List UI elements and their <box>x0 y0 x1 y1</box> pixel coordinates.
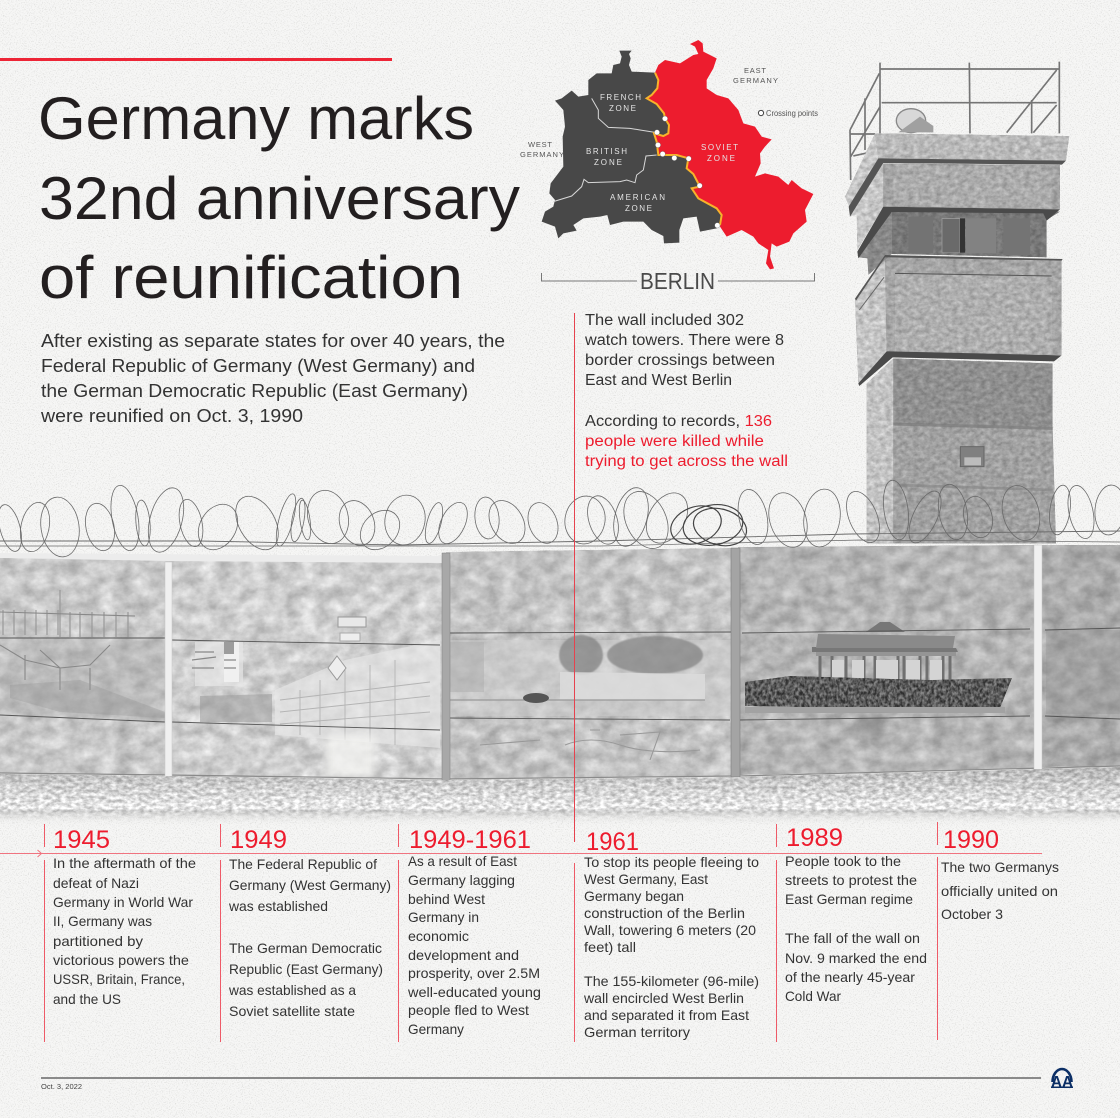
title <box>38 85 520 311</box>
wall: panels <box>0 545 1120 779</box>
timeline: 1949: Republic (East Germany) <box>229 961 383 977</box>
accent line above title <box>0 58 392 61</box>
map: western zones <box>542 51 722 243</box>
title: Germany marks <box>38 85 474 152</box>
timeline <box>0 822 1059 1042</box>
timeline: 1961: Germany began <box>584 888 684 904</box>
timeline: 1961: construction of the Berlin <box>584 905 745 921</box>
timeline: 1949: 1949 <box>230 826 287 854</box>
timeline: 1961: Wall, towering 6 meters (20 <box>584 922 756 938</box>
info text: wall facts <box>584 312 788 470</box>
timeline: 1945: 1945 <box>53 826 110 854</box>
timeline: 1990: The two Germanys <box>941 859 1059 875</box>
timeline: 1945: partitioned by <box>53 933 143 949</box>
tower: railing <box>850 62 1059 180</box>
map: zone labels: ZONE <box>594 158 622 167</box>
timeline: 1945: II, Germany was <box>53 913 152 929</box>
timeline: 1989: 1989 <box>786 824 843 852</box>
map: zone labels: AMERICAN <box>610 193 665 202</box>
info text: wall facts: trying to get across the wall <box>585 453 788 470</box>
info text: wall facts: people were killed while <box>585 433 764 450</box>
timeline: 1949-1961: well-educated young <box>407 984 541 1000</box>
intro text <box>40 331 505 426</box>
concrete wall <box>0 545 1120 826</box>
footer date: Oct. 3, 2022 <box>41 1082 82 1091</box>
info text: wall facts: border crossings between <box>585 352 775 369</box>
timeline: 1945: USSR, Britain, France, <box>53 971 185 987</box>
barbed wire <box>0 479 1120 559</box>
map: zone labels: ZONE <box>707 154 735 163</box>
timeline: 1949: was established <box>228 898 328 914</box>
wall: mural trees and field <box>450 635 735 760</box>
intro text: the German Democratic Republic (East Germany) <box>41 381 468 401</box>
info text: wall facts: According to records, 136 <box>585 413 772 430</box>
timeline: 1949-1961: 1949-1961 <box>409 826 531 854</box>
timeline: 1961: German territory <box>584 1024 690 1040</box>
timeline: 1945: defeat of Nazi <box>53 875 139 891</box>
map: legend crossing points: Crossing points <box>766 109 818 118</box>
timeline: 1949-1961: development and <box>408 947 519 963</box>
timeline: 1945: victorious powers the <box>53 952 189 968</box>
timeline: 1961: The 155-kilometer (96-mile) <box>584 973 759 989</box>
timeline: 1961 <box>574 828 759 1042</box>
timeline: 1990: 1990 <box>943 826 999 854</box>
timeline: 1961: and separated it from East <box>584 1007 749 1023</box>
timeline: 1989: The fall of the wall on <box>785 930 920 946</box>
map: Berlin zones <box>520 40 818 294</box>
map: zone labels <box>586 93 738 213</box>
info text: wall facts: East and West Berlin <box>585 372 732 389</box>
map: soviet zone <box>647 40 813 269</box>
tower: edges and windows <box>849 158 1066 490</box>
wall: mural centre, street scene <box>192 617 440 777</box>
timeline: 1945: Germany in World War <box>53 894 193 910</box>
timeline: 1945: and the US <box>53 991 121 1007</box>
tower: body <box>845 133 1069 543</box>
timeline: 1989: Cold War <box>785 988 841 1004</box>
watch tower <box>845 62 1069 543</box>
timeline: 1949-1961: Germany <box>408 1021 464 1037</box>
timeline: 1949-1961 <box>398 824 541 1042</box>
intro text: Federal Republic of Germany (West Germany) and <box>41 356 475 376</box>
wall: posts <box>165 545 1042 781</box>
map: crossing points <box>654 116 720 228</box>
timeline: 1949-1961: Germany in <box>408 909 479 925</box>
vertical divider, upper <box>574 313 576 842</box>
map: outside labels: EAST <box>744 66 766 75</box>
map: zone labels: FRENCH <box>600 93 641 102</box>
map: Berlin label: BERLIN <box>640 268 715 294</box>
timeline: 1949-1961: Germany lagging <box>408 872 515 888</box>
wall: mural Brandenburg Gate and crowd <box>745 622 1012 736</box>
map: outside labels: GERMANY <box>733 76 778 85</box>
timeline: 1949: was established as a <box>228 982 356 998</box>
map: outside labels: GERMANY <box>520 150 564 159</box>
info text: wall facts: The wall included 302 <box>585 312 744 329</box>
map: wall border line <box>647 73 722 225</box>
timeline: 1945: In the aftermath of the <box>53 855 196 871</box>
map: zone labels: BRITISH <box>586 147 627 156</box>
info text: wall facts: watch towers. There were 8 <box>584 332 784 349</box>
map: zone labels: ZONE <box>609 104 636 113</box>
timeline: 1990 <box>938 822 1059 1040</box>
map: outside labels: WEST <box>528 140 552 149</box>
timeline: 1989: People took to the <box>785 853 901 869</box>
timeline: 1949-1961: As a result of East <box>408 853 517 869</box>
timeline: 1961: feet) tall <box>584 939 636 955</box>
timeline: 1961: 1961 <box>586 828 639 856</box>
timeline: 1949-1961: behind West <box>408 891 485 907</box>
footer rule <box>41 1077 1041 1079</box>
timeline: 1949: Germany (West Germany) <box>229 877 391 893</box>
wall: cracks <box>0 628 1120 779</box>
wall: darker right panel <box>1046 630 1120 714</box>
wall: mural left, fence <box>0 590 165 718</box>
timeline: 1961: wall encircled West Berlin <box>583 990 744 1006</box>
timeline: 1949-1961: people fled to West <box>408 1002 529 1018</box>
intro text: were reunified on Oct. 3, 1990 <box>40 406 303 426</box>
timeline: 1961: West Germany, East <box>584 871 708 887</box>
timeline: 1949-1961: economic <box>408 928 469 944</box>
timeline: 1989: East German regime <box>785 891 913 907</box>
title: of reunification <box>39 244 463 311</box>
timeline: 1949: Soviet satellite state <box>229 1003 355 1019</box>
title: 32nd anniversary <box>39 165 520 232</box>
map: zone labels: ZONE <box>625 204 652 213</box>
tower: searchlight <box>896 109 933 133</box>
map: Berlin label <box>542 268 814 294</box>
timeline: 1990: October 3 <box>941 906 1003 922</box>
timeline: 1990: officially united on <box>941 883 1058 899</box>
timeline: 1989: of the nearly 45-year <box>785 969 915 985</box>
intro text: After existing as separate states for over 40 years, the <box>41 331 505 351</box>
timeline: 1989: streets to protest the <box>785 872 917 888</box>
timeline: 1945 <box>44 824 196 1042</box>
timeline: 1961: To stop its people fleeing to <box>584 854 759 870</box>
timeline: 1949: The German Democratic <box>229 940 382 956</box>
wall: top cap <box>0 553 444 563</box>
timeline: 1989: Nov. 9 marked the end <box>785 950 927 966</box>
timeline: axis with arrow <box>0 850 1042 857</box>
timeline: 1949-1961: prosperity, over 2.5M <box>408 965 540 981</box>
wall: ground <box>0 767 1120 826</box>
icon: news agency logo: AA <box>1051 1074 1073 1091</box>
timeline: 1949 <box>220 824 391 1042</box>
timeline: 1989 <box>776 824 927 1042</box>
timeline: 1949: The Federal Republic of <box>229 856 377 872</box>
map: outside labels <box>520 66 778 159</box>
map: zone labels: SOVIET <box>701 143 738 152</box>
